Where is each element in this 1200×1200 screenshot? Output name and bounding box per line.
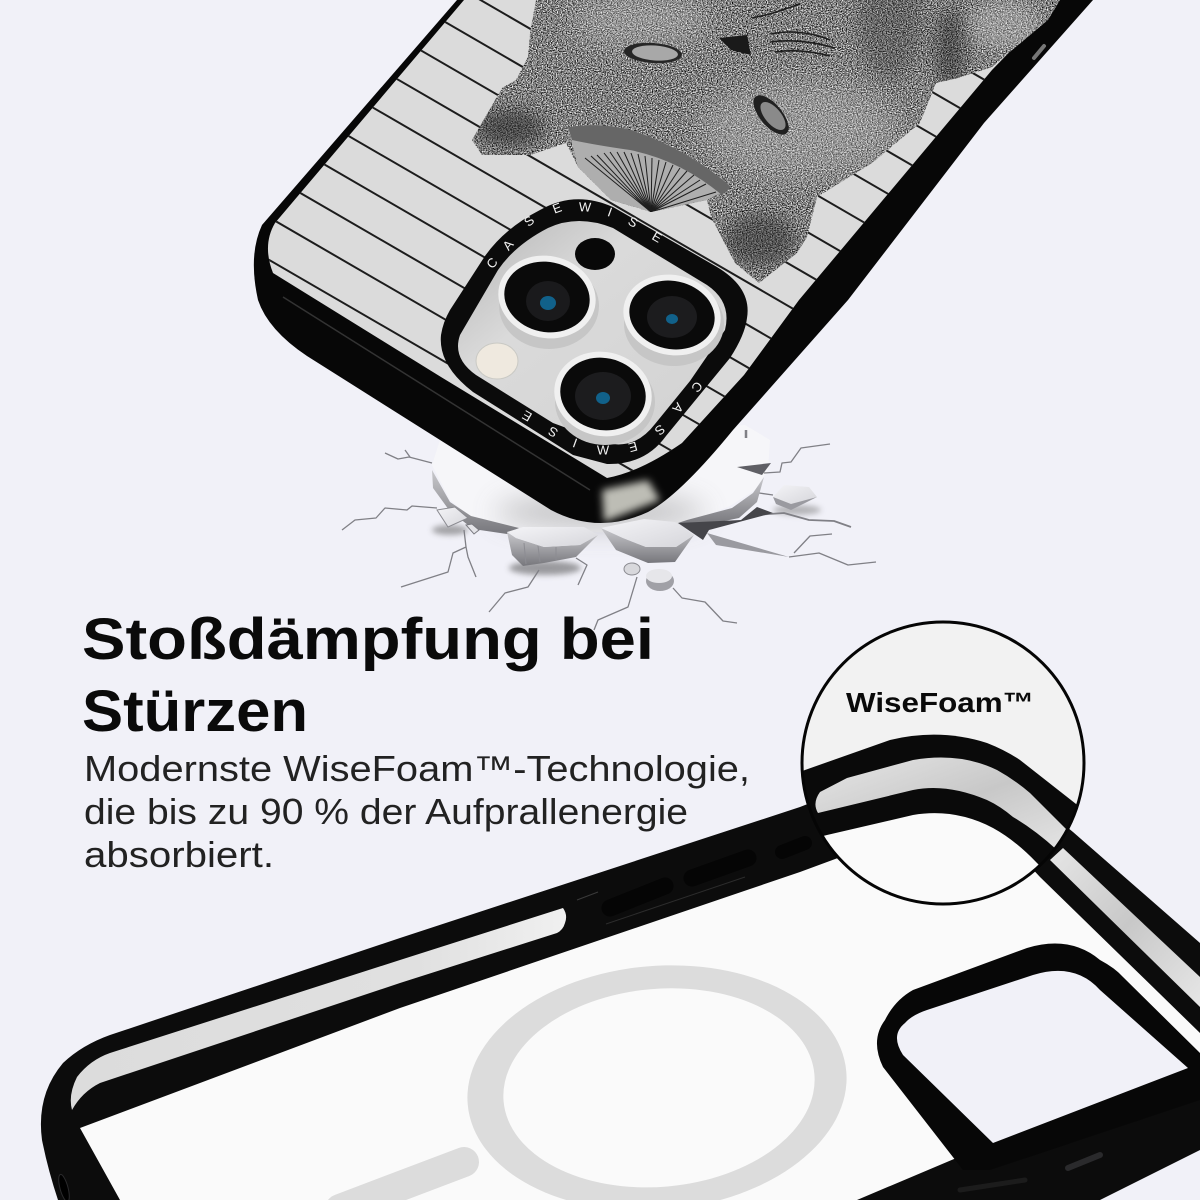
camera module [441,199,748,464]
left side slot [71,908,566,1110]
brand text bottom: W [597,442,610,458]
camera window [458,221,727,444]
clear interior [80,830,1200,1200]
description text: die bis zu 90 % der Aufprallenergie [84,791,688,832]
cat illustration [460,0,1070,295]
heading: Stürzen [82,679,308,744]
magsafe stem [340,1162,464,1200]
brand text bottom: S [545,423,561,441]
clear case back view [41,760,1200,1200]
camera cutout frame [877,944,1200,1170]
rubble right stone [773,485,817,510]
brand text bottom: A [669,400,687,416]
phone with printed case [254,0,1093,523]
brand text bottom: E [519,407,535,425]
brand text bottom: C [688,379,706,395]
cat left eye [624,42,682,64]
cracked ground impact [342,425,876,630]
lens 3 [546,343,660,445]
magnified frame [804,734,1076,864]
rubble left rim [432,470,519,534]
camera cutout [897,971,1188,1143]
corner glare [283,46,1044,522]
rubble piece B [601,519,694,563]
pinstripes [269,0,984,471]
callout label: WiseFoam™ [846,687,1034,718]
brand text top: E [550,199,564,217]
cat nose [719,35,751,55]
lens 1 [491,247,603,349]
brand text bottom [519,379,706,458]
brand text top: W [578,199,592,215]
crack lines [342,430,876,630]
case frame [254,0,1093,523]
case frame [41,760,1200,1200]
brand text top: S [521,212,537,230]
brand text top: I [606,204,614,220]
bottom edge details [57,1155,1100,1200]
brand text top: C [483,255,501,271]
rubble right rim [678,463,789,557]
cat whisker marks [752,4,835,56]
heading [82,607,654,744]
heading: Stoßdämpfung bei [82,607,654,672]
rubble small left stones [437,507,479,534]
brand text bottom: S [652,421,668,439]
lens 2 [616,266,728,366]
brand text top [483,199,665,271]
camera bumper [441,199,748,464]
mushroom [568,125,731,212]
description text: absorbiert. [84,834,274,875]
side buttons [577,843,805,924]
magsafe ring [457,950,857,1200]
lidar sensor [575,238,615,270]
brand text top: A [499,237,517,253]
brand text top: E [649,228,665,246]
magnified foam slot [815,758,1066,848]
right side slot [1050,848,1200,1007]
magnifier callout: WiseFoam [790,622,1090,920]
brand text top: S [625,213,641,231]
cat right eye [753,95,788,135]
brand text bottom: I [571,435,579,451]
back surface [268,0,1060,478]
brand text bottom: E [627,439,639,455]
magnified interior [824,813,1038,902]
rubble small centre stones [624,563,674,591]
flash [476,343,518,379]
description text [84,748,750,875]
rubble piece A [507,527,598,566]
description text: Modernste WiseFoam™-Technologie, [84,748,750,789]
